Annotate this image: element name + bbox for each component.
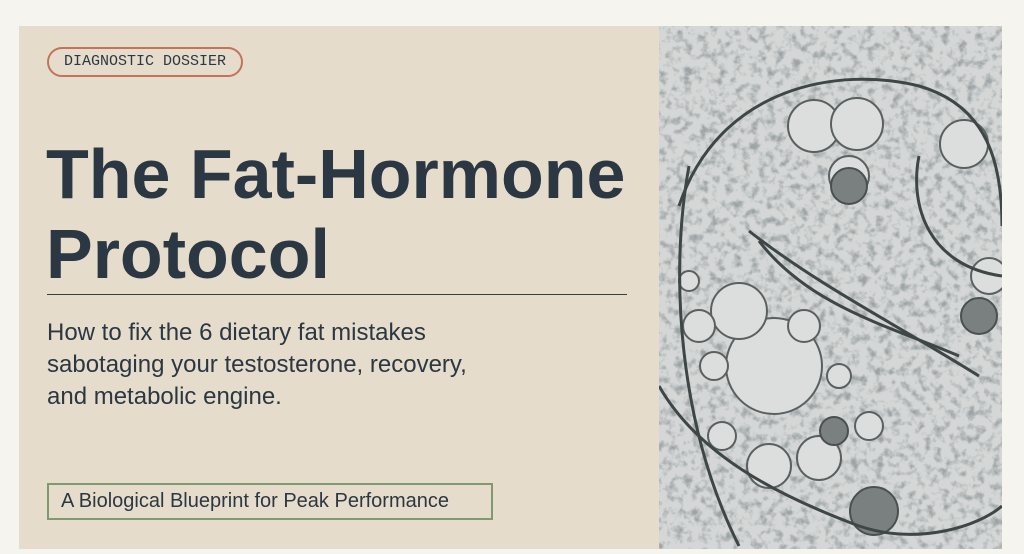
image: micrograph (659, 26, 1002, 549)
tagline box (47, 483, 493, 520)
badge: diagnostic dossier (47, 47, 243, 77)
title: The Fat-Hormone (46, 135, 625, 213)
tagline box: A Biological Blueprint for Peak Performance (61, 490, 449, 512)
subtitle (47, 319, 467, 410)
subtitle: and metabolic engine. (47, 383, 282, 410)
badge: diagnostic dossier: DIAGNOSTIC DOSSIER (64, 53, 226, 70)
panel: text (19, 26, 659, 549)
subtitle: sabotaging your testosterone, recovery, (47, 351, 467, 378)
subtitle: How to fix the 6 dietary fat mistakes (47, 319, 426, 346)
title: Protocol (46, 215, 330, 293)
title (46, 135, 625, 293)
